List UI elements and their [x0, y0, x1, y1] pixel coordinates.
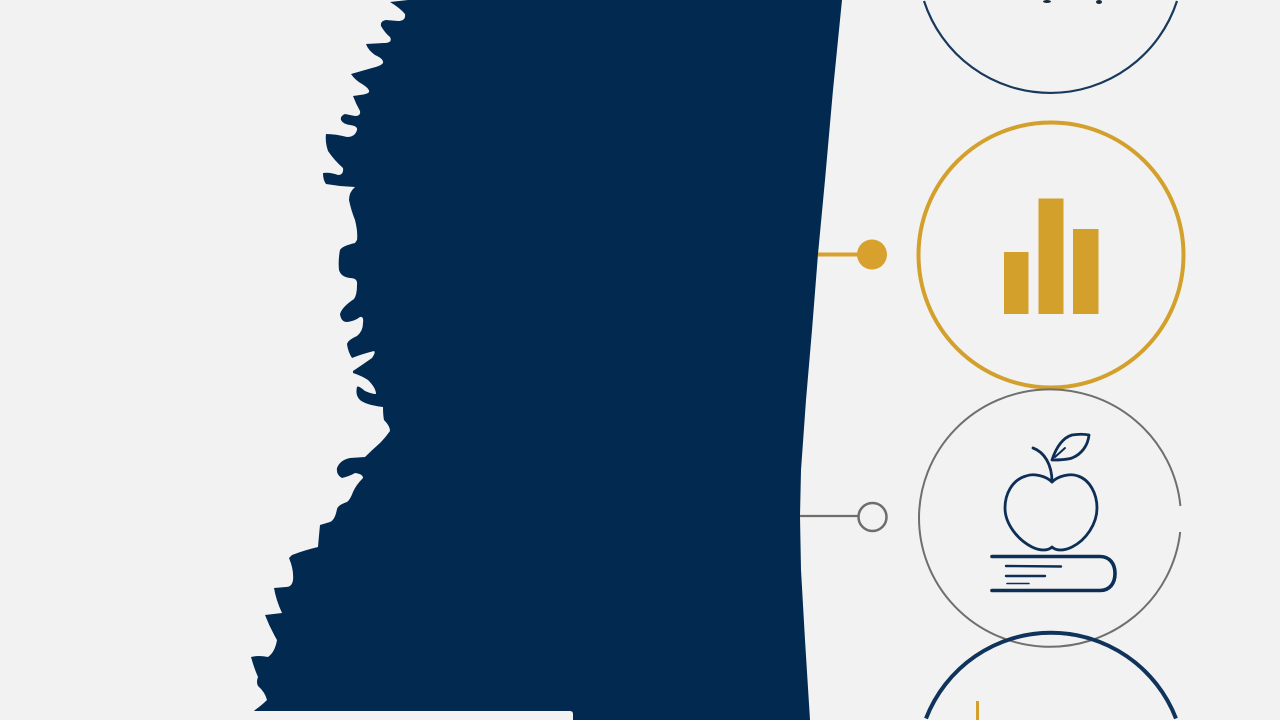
apple stem [1033, 448, 1052, 482]
gold circle with bar chart icon [918, 122, 1184, 388]
bottom circle: navy outline, cropped by the bottom edge [926, 633, 1176, 720]
icon: bar chart [1004, 198, 1098, 314]
gray circle with apple and book icon [919, 389, 1180, 647]
icon fragment: gold line [976, 701, 979, 720]
state silhouette: navy map shape [251, 0, 842, 720]
connector: gray line and hollow dot [800, 503, 886, 531]
book pages [1006, 565, 1061, 568]
top circle: navy outline, cropped by the top edge [924, 0, 1177, 93]
apple body [1005, 475, 1097, 550]
icon: apple on book [992, 434, 1115, 590]
icon fragment: tips of the cropped icon [1043, 0, 1102, 4]
leaf vein [1055, 448, 1065, 457]
apple leaf [1052, 434, 1089, 460]
book cover [992, 556, 1115, 590]
connector: gold line and filled dot [818, 240, 887, 270]
